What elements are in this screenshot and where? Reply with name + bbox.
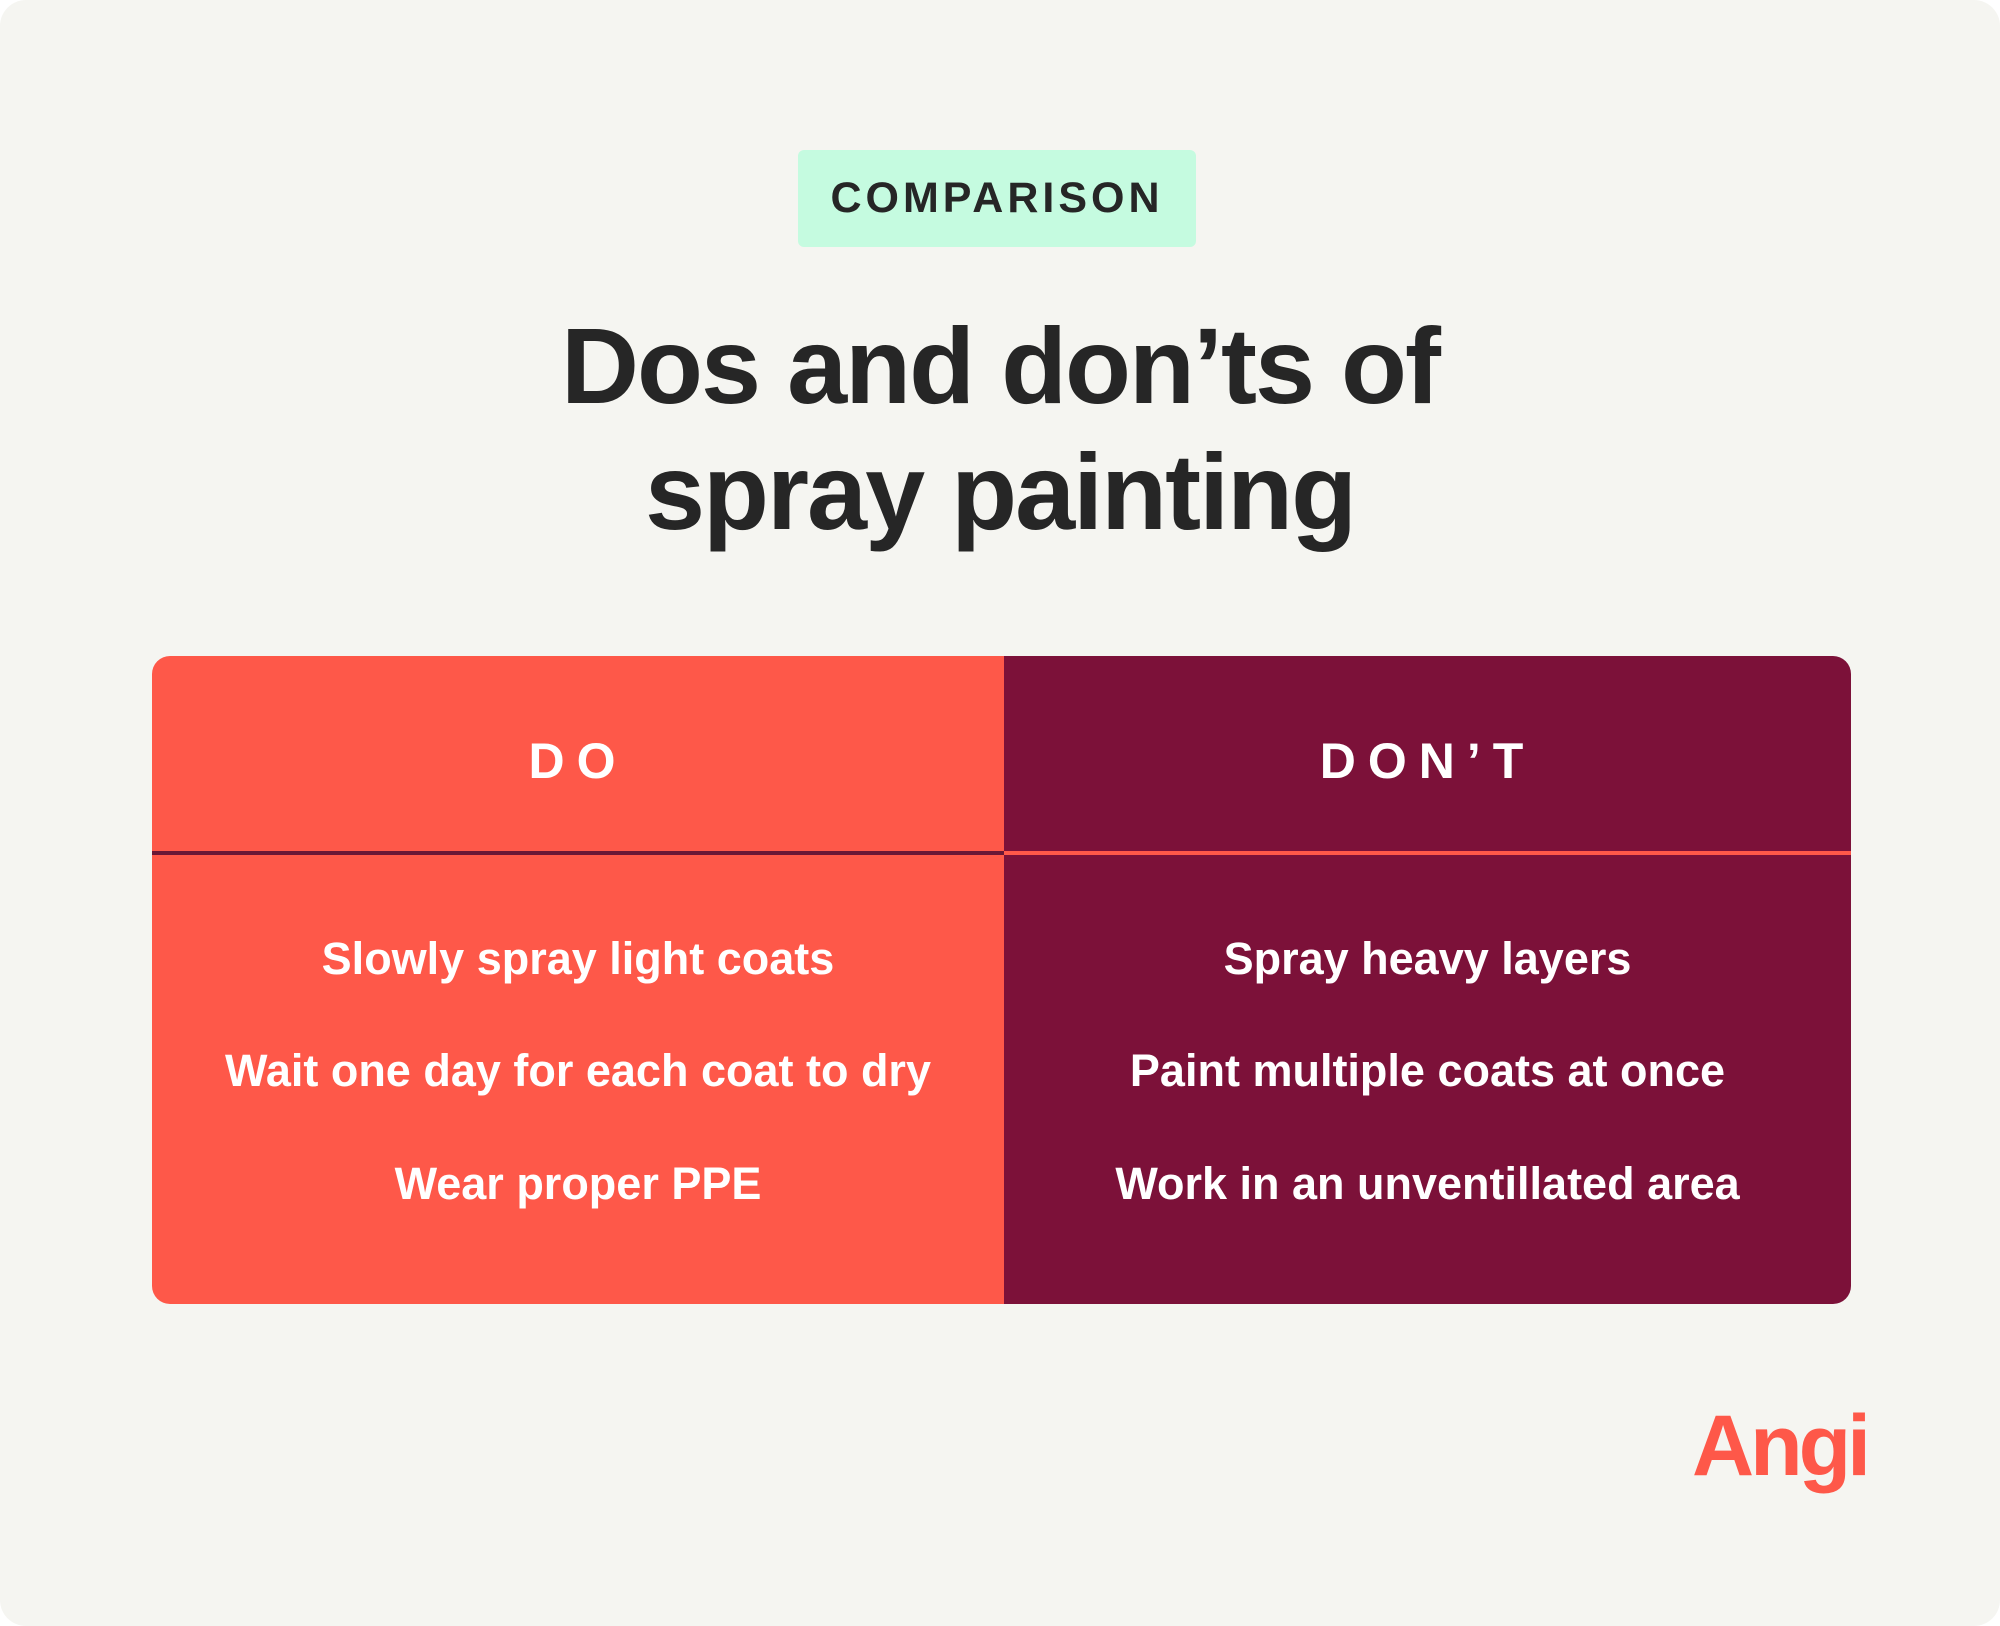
item: dont 2: Paint multiple coats at once xyxy=(1130,1045,1725,1096)
title: spray painting xyxy=(645,431,1355,552)
item: dont 3: Work in an unventillated area xyxy=(1115,1158,1740,1209)
item: do 2: Wait one day for each coat to dry xyxy=(225,1045,931,1096)
title: Dos and don’ts of xyxy=(561,305,1439,426)
badge: comparison xyxy=(798,150,1196,247)
panel: don't xyxy=(1004,656,1851,1304)
item: dont 1: Spray heavy layers xyxy=(1224,933,1631,984)
item: do 3: Wear proper PPE xyxy=(395,1158,761,1209)
item: do 1: Slowly spray light coats xyxy=(322,933,834,984)
panel: do xyxy=(152,656,1004,1304)
logo: Angi: Angi xyxy=(1692,1398,1867,1494)
badge: comparison: COMPARISON xyxy=(830,174,1164,222)
heading: do: DO xyxy=(528,733,628,789)
title xyxy=(561,305,1442,552)
heading: don't: DON’T xyxy=(1320,733,1535,789)
